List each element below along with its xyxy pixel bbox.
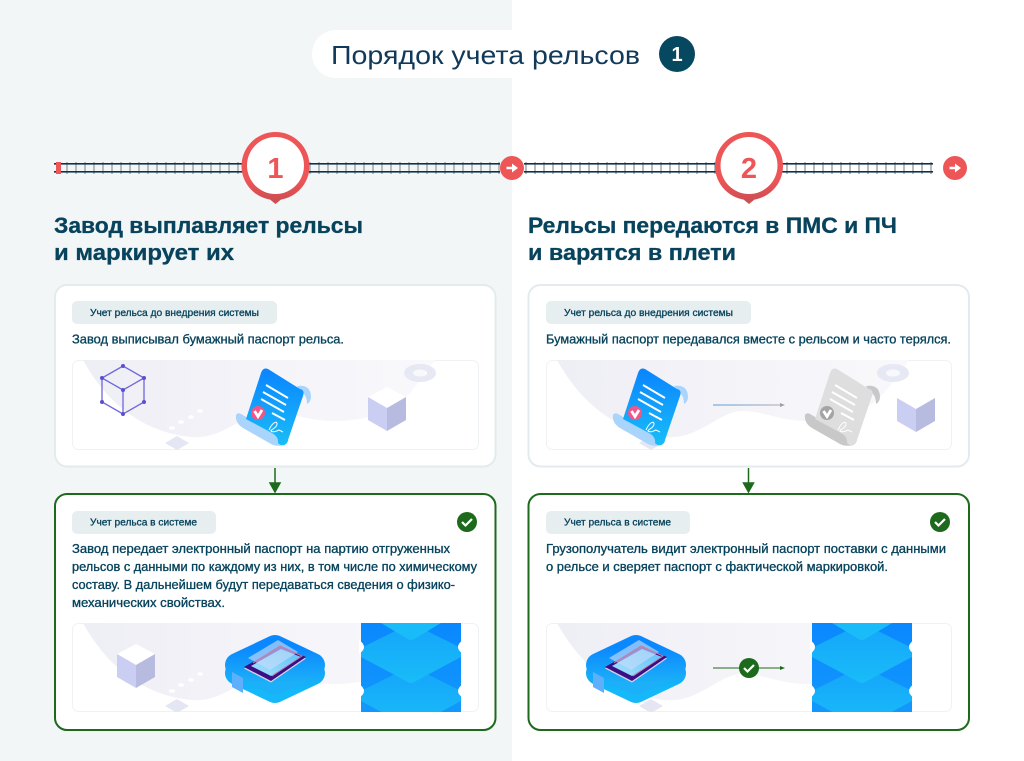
illustration: tablet, verified arrow, server stack <box>546 623 952 712</box>
tag: Учет рельса в системе <box>90 518 197 528</box>
railway track: left <box>54 162 500 174</box>
step marker 1 <box>242 132 310 204</box>
tag <box>72 511 216 534</box>
icon: check <box>930 512 950 532</box>
heading: step 2: Рельсы передаются в ПМС и ПЧ <box>528 213 897 238</box>
heading: step 2: и варятся в плети <box>528 240 736 265</box>
text <box>546 542 946 574</box>
panel: step 2 before system <box>528 285 969 466</box>
heading: step 2 <box>528 213 897 265</box>
tag <box>546 511 690 534</box>
tag: Учет рельса до внедрения системы <box>564 308 733 319</box>
heading: step 1: и маркирует их <box>54 240 235 265</box>
icon: open cube <box>897 388 935 432</box>
icon: paper passport <box>613 368 688 446</box>
arrow: step 1 down <box>270 468 280 492</box>
arrow with check <box>713 658 785 678</box>
icon: gray passport <box>805 368 880 446</box>
icon: server stack <box>359 623 461 712</box>
icon: tablet <box>232 640 313 693</box>
left background panel <box>0 0 512 761</box>
title: Порядок учета рельсов <box>331 40 640 70</box>
text: Грузополучатель видит электронный паспорт поставки с данными <box>546 542 946 556</box>
text: Завод передает электронный паспорт на партию отгруженных <box>72 542 451 556</box>
icon: cube <box>368 387 406 431</box>
arrow: step 2 down <box>744 468 754 492</box>
panel: step 1 in system <box>55 494 496 730</box>
step marker 1: 1 <box>267 153 284 185</box>
icon: wire cube <box>100 364 146 416</box>
text: рельсов с данными по каждому из них, в том числе по химическому <box>72 560 478 574</box>
icon: server stack <box>810 623 912 712</box>
title number badge <box>659 36 695 72</box>
step marker 2 <box>715 132 783 204</box>
step marker 2: 2 <box>741 153 757 185</box>
arrow <box>713 403 785 407</box>
panel: step 2 in system <box>528 494 969 730</box>
title <box>312 30 672 78</box>
panel: step 1 before system <box>55 285 496 466</box>
tag <box>72 301 277 324</box>
illustration: cube, tablet, server stack <box>72 623 479 712</box>
illustration: passport transferred and lost <box>546 360 952 450</box>
tag: Учет рельса до внедрения системы <box>90 308 259 319</box>
icon: paper passport <box>236 368 311 446</box>
text: Завод выписывал бумажный паспорт рельса. <box>72 332 344 346</box>
arrow button: right <box>943 156 967 180</box>
arrow button: middle <box>500 156 524 180</box>
text: о рельсе и сверяет паспорт с фактической маркировкой. <box>546 560 888 574</box>
icon: check <box>457 512 477 532</box>
text: механических свойствах. <box>72 596 225 610</box>
icon: tablet <box>593 640 674 693</box>
text <box>72 542 478 610</box>
illustration: wire cube, paper passport, cube <box>72 360 478 450</box>
tag <box>546 301 751 324</box>
title number badge: 1 <box>671 44 683 66</box>
heading: step 1: Завод выплавляет рельсы <box>54 213 363 238</box>
text: составу. В дальнейшем будут передаваться сведения о физико- <box>72 578 455 592</box>
tag: Учет рельса в системе <box>564 518 671 528</box>
heading: step 1 <box>54 213 363 265</box>
icon: cube <box>117 644 155 688</box>
railway track: right <box>524 162 933 174</box>
text: Бумажный паспорт передавался вместе с рельсом и часто терялся. <box>546 332 951 346</box>
